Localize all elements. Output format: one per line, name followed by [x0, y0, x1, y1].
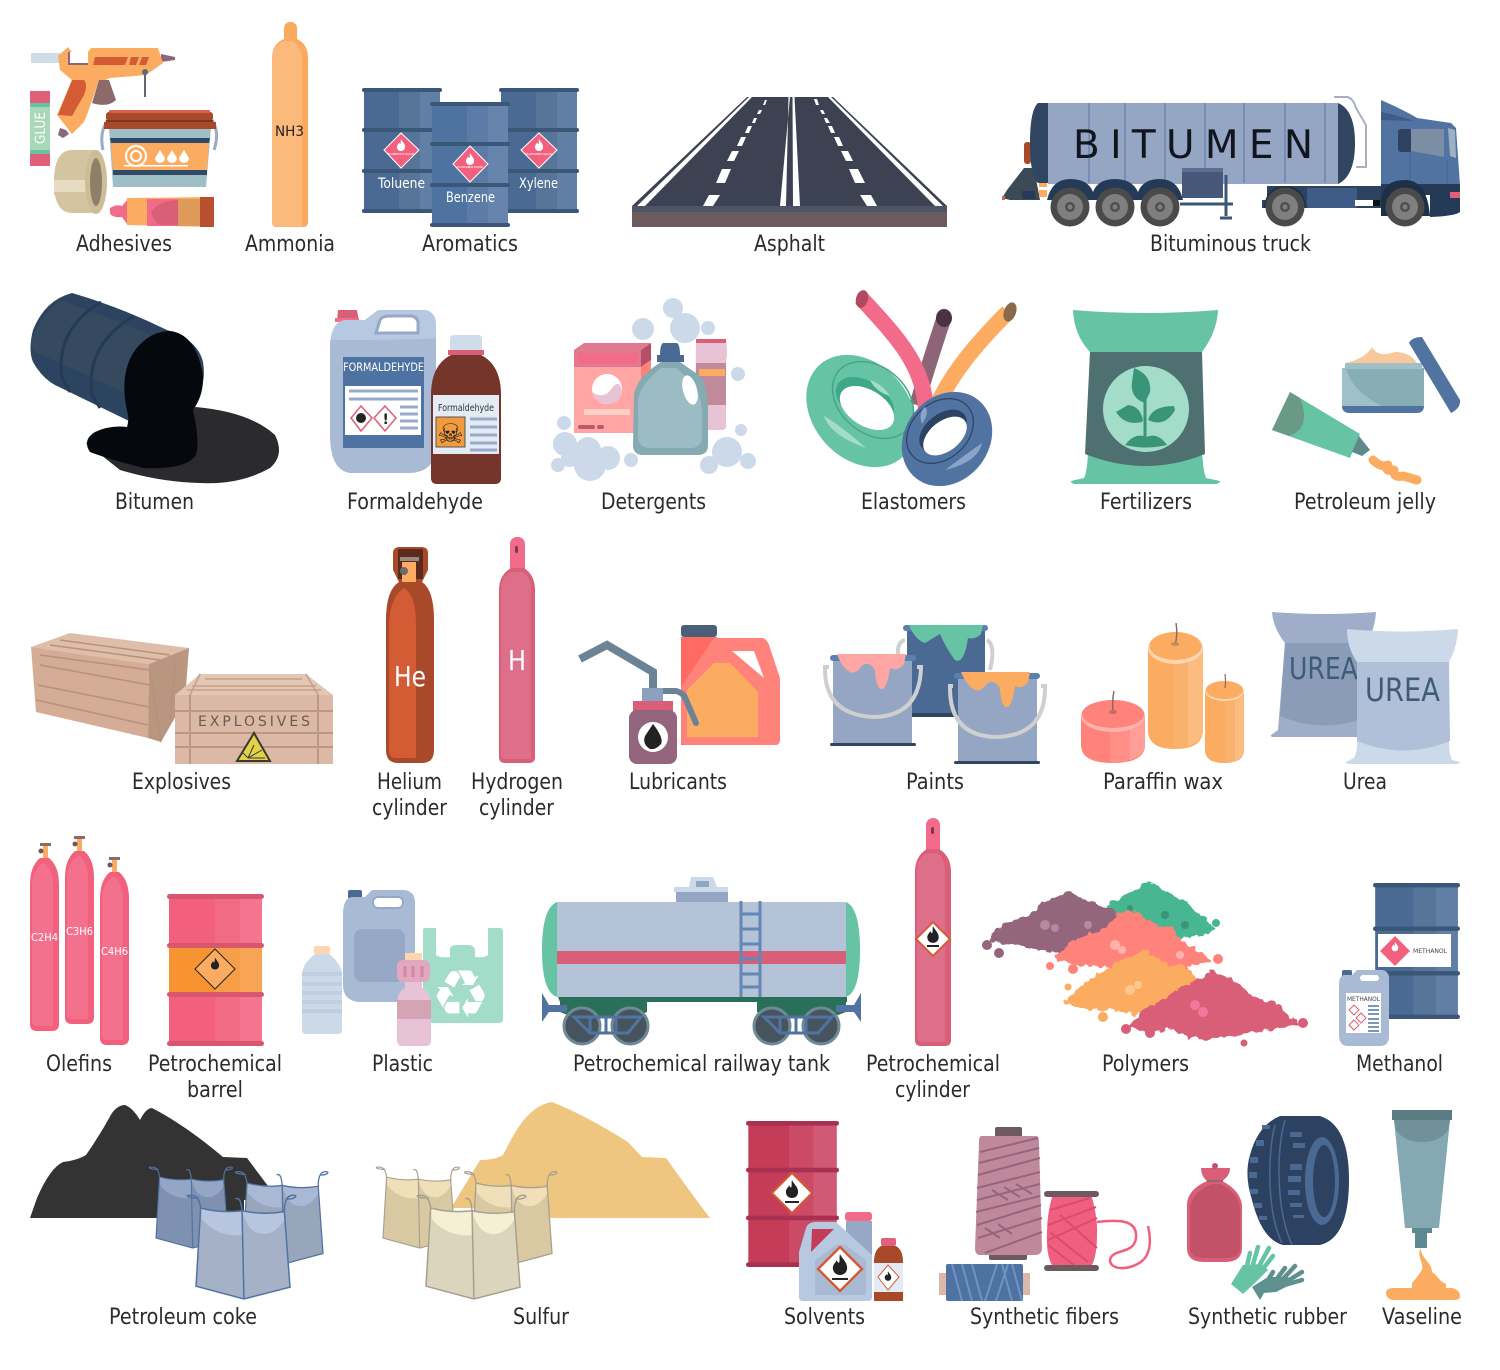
icon: lubricant jug [681, 625, 780, 745]
icon: back urea bag: UREA [1289, 652, 1358, 687]
label: Petrochemical cylinder: cylinder [895, 1077, 971, 1103]
icon: methanol jug [1339, 970, 1389, 1046]
panel: Petroleum coke [30, 1105, 328, 1330]
icon: sulfur bulk bags [376, 1167, 557, 1299]
icon: bitumen pool [86, 407, 279, 483]
label: Olefins: Olefins [46, 1051, 112, 1077]
panel: Hydrogen cylinder [471, 537, 563, 821]
icon: formaldehyde bottle: Formaldehyde [438, 403, 494, 414]
icon: pink plastic bottle [397, 953, 431, 1046]
panel: Detergents [551, 298, 756, 515]
icon: sulfur pile [451, 1102, 710, 1218]
label: Petroleum jelly: Petroleum jelly [1294, 489, 1436, 515]
panel: Elastomers [784, 289, 1019, 515]
icon: benzene barrel: FLAMMABLE LIQUID [457, 165, 484, 169]
icon: plastic bag [423, 928, 503, 1033]
icon: petrochemical barrel [167, 894, 264, 1046]
label: Sulfur: Sulfur [513, 1304, 570, 1330]
icon: solvent jug [799, 1212, 872, 1301]
panel: Formaldehyde [330, 310, 501, 515]
label: Urea: Urea [1343, 769, 1387, 795]
label: Formaldehyde: Formaldehyde [347, 489, 483, 515]
label: Hydrogen cylinder: cylinder [479, 795, 555, 821]
panel: Asphalt [632, 97, 947, 257]
panel: Petrochemical cylinder [866, 818, 1000, 1103]
panel: Paraffin wax [1081, 623, 1244, 795]
icon: wagon undercarriage [542, 993, 861, 1044]
label: Solvents: Solvents [784, 1304, 865, 1330]
panel: Petrochemical railway tank [542, 877, 861, 1077]
icon: tape roll [54, 150, 107, 214]
icon: solvent bottle [874, 1238, 903, 1301]
label: Adhesives: Adhesives [76, 231, 172, 257]
icon: hose ends [854, 289, 1019, 327]
icon: green glove [1231, 1247, 1273, 1294]
icon: C2H4 cylinder: C2H4 [31, 931, 58, 944]
label: Explosives: Explosives [132, 769, 231, 795]
icon: squeezed jelly [1373, 460, 1417, 480]
icon: formaldehyde bottle: ☠ [437, 419, 464, 450]
icon: glue bucket [102, 110, 217, 187]
icon: tank ends [542, 902, 860, 997]
icon: methanol barrel: METHANOL [1413, 947, 1447, 955]
panel: Methanol [1339, 883, 1460, 1077]
icon: vaseline blob [1386, 1248, 1460, 1300]
icon: helium cylinder [386, 547, 434, 763]
label: Petrochemical barrel: barrel [187, 1077, 243, 1103]
icon: loose thread [1097, 1221, 1150, 1268]
icon: tall candle [1148, 623, 1203, 749]
icon: grey paint can with orange paint [950, 672, 1045, 764]
icon: red pile [1121, 973, 1308, 1046]
icon: green pile [1109, 884, 1220, 935]
panel: Ammonia [245, 22, 335, 257]
icon: jar of jelly [1342, 347, 1424, 413]
panel: Vaseline [1382, 1110, 1462, 1330]
icon: asphalt road [632, 97, 947, 227]
icon: xylene barrel: Xylene [519, 176, 558, 192]
label: Fertilizers: Fertilizers [1100, 489, 1192, 515]
icon: coke pile [30, 1105, 270, 1218]
icon: blue yarn spool [939, 1264, 1030, 1301]
icon: water bottle [302, 946, 342, 1034]
icon: hot water bottle [1187, 1163, 1242, 1262]
icon: teal glove [1252, 1266, 1302, 1300]
label: Aromatics: Aromatics [422, 231, 518, 257]
icon: tipped barrel [30, 293, 204, 421]
icon: spilled bitumen [87, 331, 203, 468]
icon: small candle [1205, 674, 1244, 763]
label: Paraffin wax: Paraffin wax [1103, 769, 1223, 795]
icon: ladder rail [1334, 97, 1366, 167]
panel: Adhesives [30, 47, 217, 257]
icon: helium cylinder: He [394, 660, 426, 693]
panel: Plastic [302, 890, 503, 1077]
panel: Bituminous truck [1002, 97, 1460, 257]
icon: xylene barrel [499, 88, 579, 213]
icon: glue gun [31, 47, 175, 138]
icon: ammonia cylinder: NH3 [275, 124, 304, 140]
icon: tire [1247, 1116, 1349, 1245]
icon: benzene barrel: Benzene [446, 190, 495, 206]
icon: pink yarn spool [1044, 1191, 1099, 1271]
panel: Sulfur [376, 1102, 710, 1330]
panel: Aromatics [362, 88, 579, 257]
icon: formaldehyde jug: ! [382, 412, 389, 428]
panel: Explosives [31, 633, 333, 795]
icon: methanol barrel [1373, 883, 1460, 1019]
panel: Polymers [982, 884, 1308, 1077]
icon: tank with text: BITUMEN [1073, 123, 1313, 168]
icon: tank body [557, 902, 846, 997]
panel: Helium cylinder [372, 547, 448, 821]
icon: glue tube [110, 197, 214, 227]
icon: bubbles [551, 298, 756, 481]
icon: fertilizer bag [1071, 310, 1220, 484]
icon: hoses [861, 298, 1008, 412]
icon: C4H6 cylinder [100, 857, 129, 1045]
icon: C3H6 cylinder [65, 836, 94, 1024]
icon: blue elastomer ring [883, 374, 1011, 504]
label: Paints: Paints [906, 769, 964, 795]
icon: C2H4 cylinder [30, 843, 59, 1031]
icon: explosives crate [175, 674, 333, 764]
label: Plastic: Plastic [372, 1051, 433, 1077]
panel: Fertilizers [1071, 310, 1220, 515]
label: Helium cylinder: Helium [377, 769, 442, 795]
icon: formaldehyde jug [330, 310, 436, 473]
icon: C4H6 cylinder: C4H6 [101, 945, 128, 958]
panel: Olefins [30, 836, 129, 1077]
icon: wooden crate [31, 633, 189, 742]
icon: plant [1116, 368, 1175, 448]
icon: tank dome [674, 877, 728, 909]
icon: squeezed tube [1272, 392, 1370, 458]
label: Helium cylinder: cylinder [372, 795, 448, 821]
icon: solvent barrel [746, 1121, 839, 1267]
panel: Solvents [746, 1121, 903, 1330]
icon: purple pile [982, 893, 1117, 958]
icon: toluene barrel [362, 88, 442, 213]
panel: Bitumen [30, 293, 279, 515]
icon: rear trailer gear [1002, 142, 1047, 200]
icon: glue stick: GLUE [33, 112, 49, 144]
label: Petrochemical railway tank: Petrochemical railway tank [573, 1051, 830, 1077]
label: Lubricants: Lubricants [629, 769, 727, 795]
icon: benzene barrel [430, 102, 510, 227]
label: Detergents: Detergents [601, 489, 706, 515]
icon: detergent box [574, 343, 651, 433]
panel: Synthetic fibers [939, 1127, 1150, 1330]
label: Asphalt: Asphalt [754, 231, 825, 257]
label: Methanol: Methanol [1356, 1051, 1443, 1077]
icon: vaseline tube [1392, 1110, 1452, 1248]
label: Synthetic rubber: Synthetic rubber [1188, 1304, 1348, 1330]
icon: C3H6 cylinder: C3H6 [66, 925, 93, 938]
label: Petrochemical cylinder: Petrochemical [866, 1051, 1000, 1077]
icon: petrochemical cylinder [915, 818, 951, 1046]
icon: front urea bag [1346, 629, 1460, 764]
label: Hydrogen cylinder: Hydrogen [471, 769, 563, 795]
label: Vaseline: Vaseline [1382, 1304, 1462, 1330]
icon: toluene barrel: FLAMMABLE LIQUID [388, 152, 415, 156]
icon: plastic jug [343, 890, 415, 1002]
icon: wide red candle [1081, 691, 1145, 763]
icon: big yarn spool [975, 1127, 1042, 1260]
panel: Urea [1271, 612, 1460, 795]
icon: hydrogen cylinder [499, 537, 535, 763]
icon: xylene barrel: FLAMMABLE LIQUID [526, 152, 553, 156]
label: Elastomers: Elastomers [861, 489, 966, 515]
icon: back urea bag [1271, 612, 1376, 737]
icon: jar lid [1409, 337, 1460, 413]
icon: oil can [580, 645, 696, 764]
label: Polymers: Polymers [1102, 1051, 1189, 1077]
panel: Petrochemical barrel [148, 894, 282, 1103]
icon: coke bulk bags [149, 1167, 328, 1299]
label: Petrochemical barrel: Petrochemical [148, 1051, 282, 1077]
icon: front urea bag: UREA [1365, 671, 1440, 709]
icon: truck wheels [1047, 179, 1430, 226]
panel: Paints [825, 625, 1045, 795]
icon: formaldehyde jug: FORMALDEHYDE [343, 360, 424, 374]
icon: methanol jug: METHANOL [1347, 995, 1380, 1003]
icon: detergent bottle [633, 343, 708, 455]
icon: green elastomer ring [784, 333, 938, 489]
icon: glue stick [30, 91, 50, 166]
icon: blue paint can with green paint [898, 625, 992, 717]
icon: plastic bag: ♻ [431, 956, 490, 1033]
icon: side box and leg [1180, 168, 1233, 218]
label: Synthetic fibers: Synthetic fibers [970, 1304, 1119, 1330]
panel: Petroleum jelly [1272, 337, 1460, 515]
panel: Synthetic rubber [1187, 1116, 1349, 1330]
icon: formaldehyde bottle [431, 335, 501, 484]
icon: explosives crate: EXPLOSIVES [198, 714, 310, 730]
icon: hydrogen cylinder: H [508, 644, 526, 677]
icon: pink bottle [695, 339, 727, 430]
icon: tank with text [1030, 103, 1355, 184]
label: Bituminous truck: Bituminous truck [1150, 231, 1311, 257]
label: Ammonia: Ammonia [245, 231, 335, 257]
icon: toluene barrel: Toluene [377, 176, 425, 192]
icon: grey paint can with pink paint [825, 654, 921, 746]
icon: truck cab [1262, 100, 1460, 217]
icon: ammonia cylinder [272, 22, 308, 227]
icon: ladder [741, 901, 760, 997]
icon: salmon pile [1046, 913, 1223, 974]
icon: orange pile [1064, 953, 1195, 1022]
label: Bitumen: Bitumen [115, 489, 194, 515]
panel: Lubricants [580, 625, 780, 795]
label: Petroleum coke: Petroleum coke [109, 1304, 257, 1330]
